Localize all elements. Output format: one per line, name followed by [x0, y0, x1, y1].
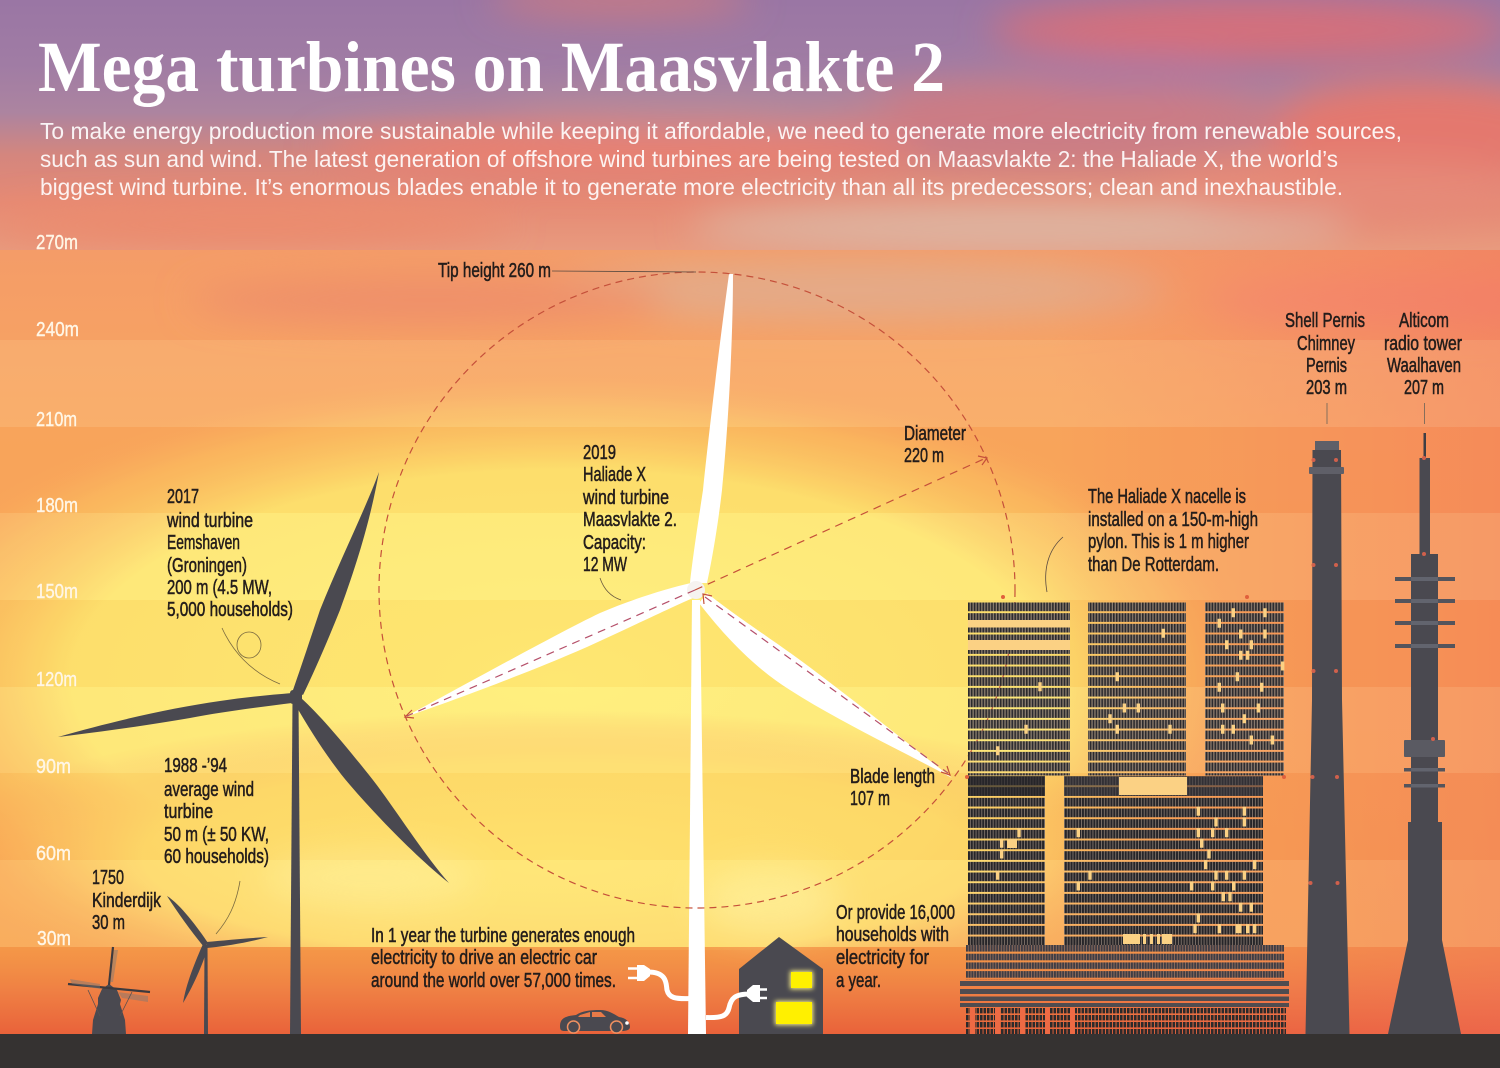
label: diameter	[904, 422, 966, 467]
label: 2019 Haliade X	[582, 441, 677, 576]
label: 2017 turbine: 200 m (4.5 MW,	[167, 576, 272, 599]
height axis labels: 150m	[36, 580, 78, 603]
label: 2017 turbine: (Groningen)	[167, 554, 247, 577]
text: households: households with	[836, 923, 949, 946]
height axis labels	[36, 231, 79, 950]
label: diameter: 220 m	[904, 444, 944, 467]
text: households: Or provide 16,000	[836, 901, 955, 924]
intro text: biggest wind turbine. It’s enormous blades enable it to generate more electricity than all its predecessors; clean and inexhaustible.	[40, 174, 1343, 200]
label: nacelle note: pylon. This is 1 m higher	[1088, 530, 1249, 553]
label: 2019 Haliade X: Capacity:	[583, 531, 646, 554]
intro text: To make energy production more sustainable while keeping it affordable, we need to generate more electricity from renewable sources,	[40, 118, 1402, 144]
leader: 1988 label	[216, 881, 240, 934]
text: households: a year.	[836, 969, 881, 992]
leader: nacelle note	[1046, 537, 1063, 592]
text: households	[836, 901, 955, 992]
label: blade length	[850, 765, 935, 810]
label: diameter: Diameter	[904, 422, 966, 445]
height axis labels: 240m	[36, 318, 79, 341]
De Rotterdam building	[960, 595, 1289, 1034]
label: Alticom: radio tower	[1384, 332, 1462, 355]
lit windows	[968, 608, 1284, 944]
text: electric car: around the world over 57,000 times.	[371, 969, 616, 992]
Alticom radio tower	[1388, 433, 1461, 1034]
icon: car	[560, 1010, 630, 1033]
height axis labels: 270m	[36, 231, 78, 254]
ground	[0, 1034, 1500, 1068]
tip height leader	[552, 271, 696, 272]
intro text	[40, 118, 1402, 200]
label: Shell Pernis: 203 m	[1306, 376, 1347, 399]
label: Shell Pernis	[1285, 309, 1365, 399]
label: nacelle note: installed on a 150-m-high	[1088, 508, 1258, 531]
label: Shell Pernis: Chimney	[1297, 332, 1356, 355]
height axis labels: 30m	[37, 927, 71, 950]
label: 1988-94 turbine: average wind	[164, 778, 254, 801]
height axis labels: 60m	[36, 842, 71, 865]
small 1988-94 turbine	[167, 896, 268, 1034]
label: Shell Pernis: Pernis	[1306, 354, 1347, 377]
text: electric car: In 1 year the turbine generates enough	[371, 924, 635, 947]
text: electric car	[371, 924, 635, 992]
label: 1750 Kinderdijk: 30 m	[92, 911, 125, 934]
icon: plug to car	[628, 965, 690, 999]
icon: plug to house	[706, 985, 767, 1018]
label: 2019 Haliade X: wind turbine	[582, 486, 669, 509]
label: 1750 Kinderdijk: 1750	[92, 866, 124, 889]
height axis labels: 90m	[36, 755, 71, 778]
label: blade length: 107 m	[850, 787, 890, 810]
dark 2017 turbine	[58, 472, 449, 1034]
label: 2017 turbine	[166, 485, 293, 621]
beacon lights	[965, 595, 1286, 779]
label: 1988-94 turbine	[164, 754, 269, 868]
label: 2017 turbine: 5,000 households)	[167, 598, 293, 621]
Shell Pernis chimney	[1306, 441, 1350, 1034]
label: nacelle note: than De Rotterdam.	[1088, 553, 1219, 576]
label: Alticom: 207 m	[1404, 376, 1444, 399]
intro text: such as sun and wind. The latest generation of offshore wind turbines are being tested on Maasvlakte 2: the Haliade X, the world’s	[40, 146, 1338, 172]
white Haliade X turbine	[405, 274, 952, 1034]
leader: Haliade label	[600, 578, 621, 600]
label: blade length: Blade length	[850, 765, 935, 788]
label: Shell Pernis: Shell Pernis	[1285, 309, 1365, 332]
leaders: towers	[1327, 403, 1424, 424]
label: 1988-94 turbine: 1988 -’94	[164, 754, 227, 777]
label: 1988-94 turbine: 50 m (± 50 KW,	[164, 823, 269, 846]
title: Mega turbines on Maasvlakte 2	[38, 27, 945, 107]
label: nacelle note: The Haliade X nacelle is	[1088, 485, 1246, 508]
label: 1988-94 turbine: turbine	[164, 800, 213, 823]
label: 2017 turbine: wind turbine	[166, 509, 253, 532]
label: Alticom: Alticom	[1399, 309, 1449, 332]
label: 2019 Haliade X: Haliade X	[583, 463, 646, 486]
height axis labels: 120m	[36, 668, 77, 691]
label: tip height: Tip height 260 m	[438, 259, 551, 282]
label: 2017 turbine: 2017	[167, 485, 199, 508]
label: 2019 Haliade X: 12 MW	[583, 553, 627, 576]
label: Alticom: Waalhaven	[1387, 354, 1461, 377]
leader: 2017 label loop	[222, 628, 280, 684]
text: households: electricity for	[836, 946, 929, 969]
label: 1750 Kinderdijk	[92, 866, 162, 934]
height axis labels: 210m	[36, 408, 77, 431]
label: 1988-94 turbine: 60 households)	[164, 845, 269, 868]
label: 2019 Haliade X: 2019	[583, 441, 616, 464]
label: 2017 turbine: Eemshaven	[167, 531, 240, 554]
windmill Kinderdijk	[68, 947, 150, 1034]
label: 1750 Kinderdijk: Kinderdijk	[92, 889, 162, 912]
height axis labels: 180m	[36, 494, 78, 517]
icon: house	[739, 937, 823, 1034]
rotor diameter circle and dimension arrows	[379, 272, 1015, 908]
label: nacelle note	[1088, 485, 1258, 576]
text: electric car: electricity to drive an electric car	[371, 946, 597, 969]
label: 2019 Haliade X: Maasvlakte 2.	[583, 508, 677, 531]
label: Alticom	[1384, 309, 1462, 399]
